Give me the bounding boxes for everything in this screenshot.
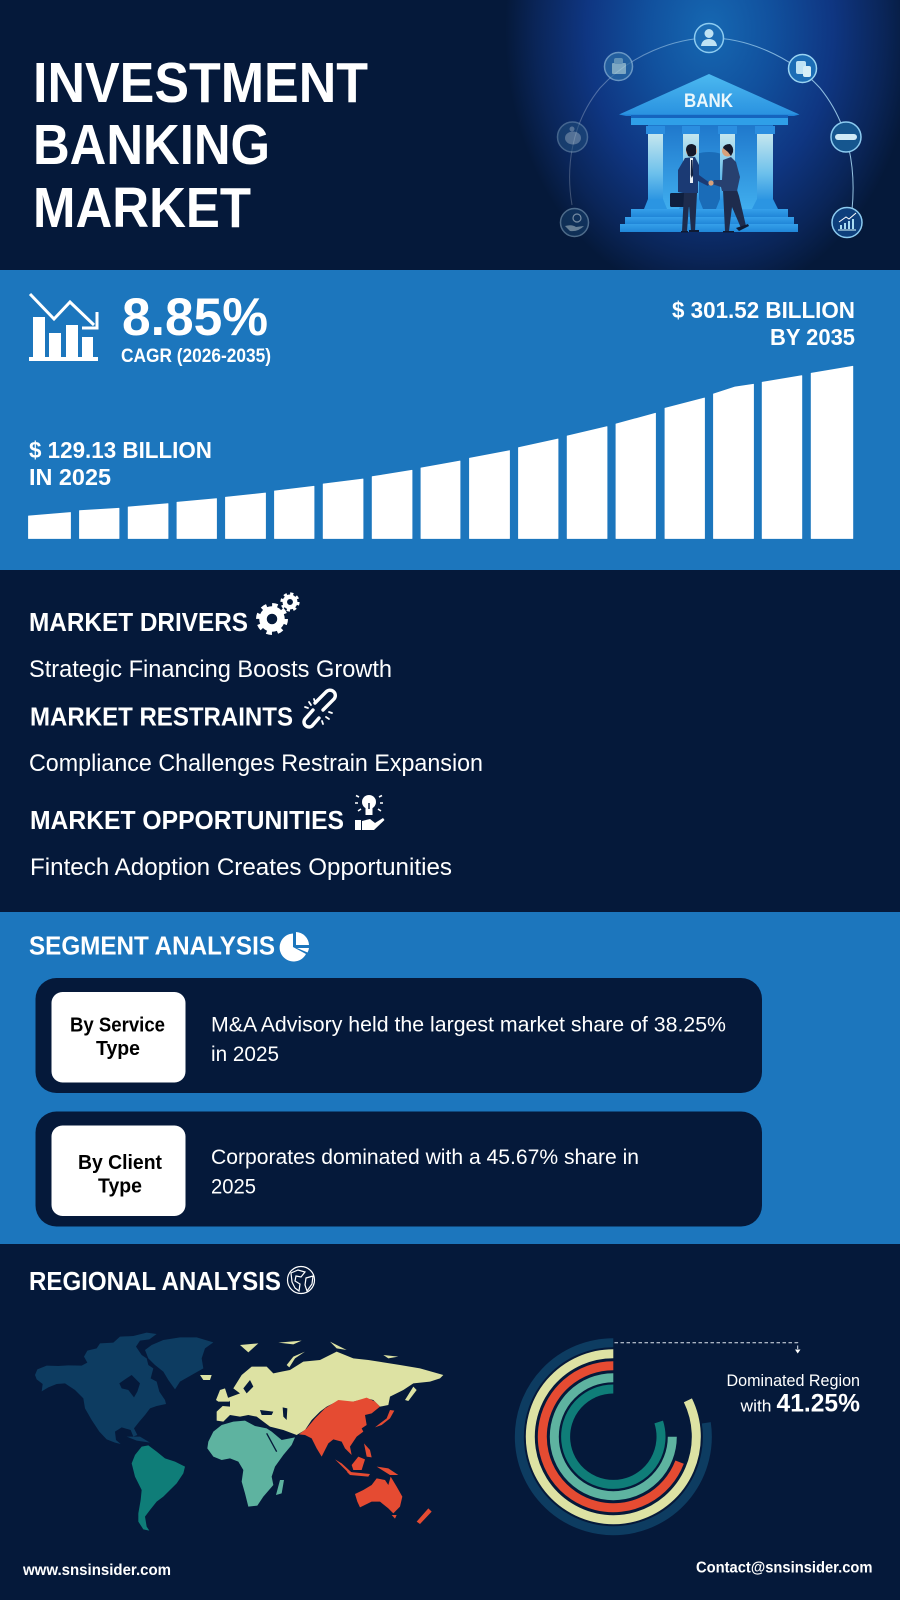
- businessmen shaking hands: [670, 144, 749, 232]
- footer: contact: Contact@snsinsider.com: [696, 1560, 872, 1576]
- region: africa: [207, 1421, 295, 1507]
- card: by client type: Type: [98, 1176, 142, 1198]
- label: BANK: BANK: [684, 91, 733, 112]
- header panel: [0, 0, 900, 270]
- heading: market restraints: MARKET RESTRAINTS: [30, 704, 293, 732]
- text: market restraints: Compliance Challenges Restrain Expansion: [29, 750, 483, 777]
- panel: market size: [0, 270, 900, 570]
- arrow: dashed leader: [614, 1343, 800, 1354]
- heading: market opportunities: MARKET OPPORTUNITIES: [30, 807, 344, 835]
- region: europe and north asia: [200, 1341, 443, 1435]
- card: by service type: M&A Advisory held the largest market share of 38.25%: [211, 1012, 726, 1036]
- icon: globe: [288, 1266, 314, 1294]
- card: by service type: in 2025: [211, 1042, 279, 1066]
- card: by client type: Corporates dominated with a 45.67% share in: [211, 1145, 639, 1169]
- card: by client type: By Client: [78, 1152, 162, 1174]
- callout: dominated region: [726, 1371, 860, 1418]
- title: INVESTMENT: [33, 51, 368, 115]
- panel: regional analysis: [0, 1244, 900, 1600]
- bank building: [619, 74, 800, 232]
- text: market drivers: Strategic Financing Boosts Growth: [29, 656, 392, 683]
- 2035 value: $ 301.52 BILLION: [672, 297, 855, 323]
- footer: website: www.snsinsider.com: [22, 1562, 171, 1579]
- region: asia pacific: [299, 1398, 432, 1524]
- icon: handshake: [831, 122, 861, 152]
- heading: segment analysis: SEGMENT ANALYSIS: [29, 932, 275, 960]
- title: BANKING: [33, 113, 270, 177]
- icon: person: [694, 24, 724, 52]
- icon: hand with light bulb: [355, 795, 384, 830]
- 2035 value: BY 2035: [770, 324, 855, 350]
- heading: market drivers: MARKET DRIVERS: [29, 609, 248, 637]
- text: market opportunities: Fintech Adoption Creates Opportunities: [30, 854, 452, 881]
- icon: growth chart: [832, 208, 862, 238]
- icon: pie chart: [280, 932, 309, 961]
- heading: regional analysis: REGIONAL ANALYSIS: [29, 1268, 281, 1296]
- illustration: bank with handshake and icon arc: [558, 24, 862, 238]
- title: [33, 51, 368, 240]
- card: by client type: [36, 1112, 762, 1226]
- icon: piggy bank: [558, 122, 588, 152]
- 2025 value: IN 2025: [29, 464, 111, 490]
- region: north america: [35, 1333, 213, 1444]
- icon: lock: [604, 52, 632, 80]
- title: MARKET: [33, 176, 251, 240]
- callout: dominated region: 41.25%: [776, 1390, 860, 1418]
- card: by service type: [36, 978, 762, 1093]
- region: south america: [132, 1445, 185, 1531]
- 2025 value: $ 129.13 BILLION: [29, 437, 212, 463]
- panel: market dynamics: [0, 570, 900, 912]
- card: by client type: 2025: [211, 1174, 256, 1198]
- icon: hand with coin: [560, 208, 588, 236]
- callout: dominated region: Dominated Region: [726, 1371, 860, 1390]
- 2025 value: [29, 437, 212, 490]
- callout: dominated region: with: [739, 1396, 772, 1416]
- icon: chart with falling arrow: [29, 294, 98, 361]
- card: by service type: By Service: [70, 1014, 165, 1036]
- 2035 value: [672, 297, 855, 350]
- panel: segment analysis: [0, 912, 900, 1244]
- bar chart: [28, 366, 853, 538]
- radial bar chart: [519, 1343, 707, 1531]
- icon: broken chain: [304, 690, 335, 727]
- world map: [35, 1333, 443, 1531]
- icon: gears: [258, 594, 298, 633]
- card: by service type: Type: [96, 1038, 140, 1060]
- CAGR label: CAGR (2026-2035): [121, 346, 271, 367]
- CAGR value: 8.85%: [122, 288, 268, 347]
- icon: coins: [788, 54, 816, 82]
